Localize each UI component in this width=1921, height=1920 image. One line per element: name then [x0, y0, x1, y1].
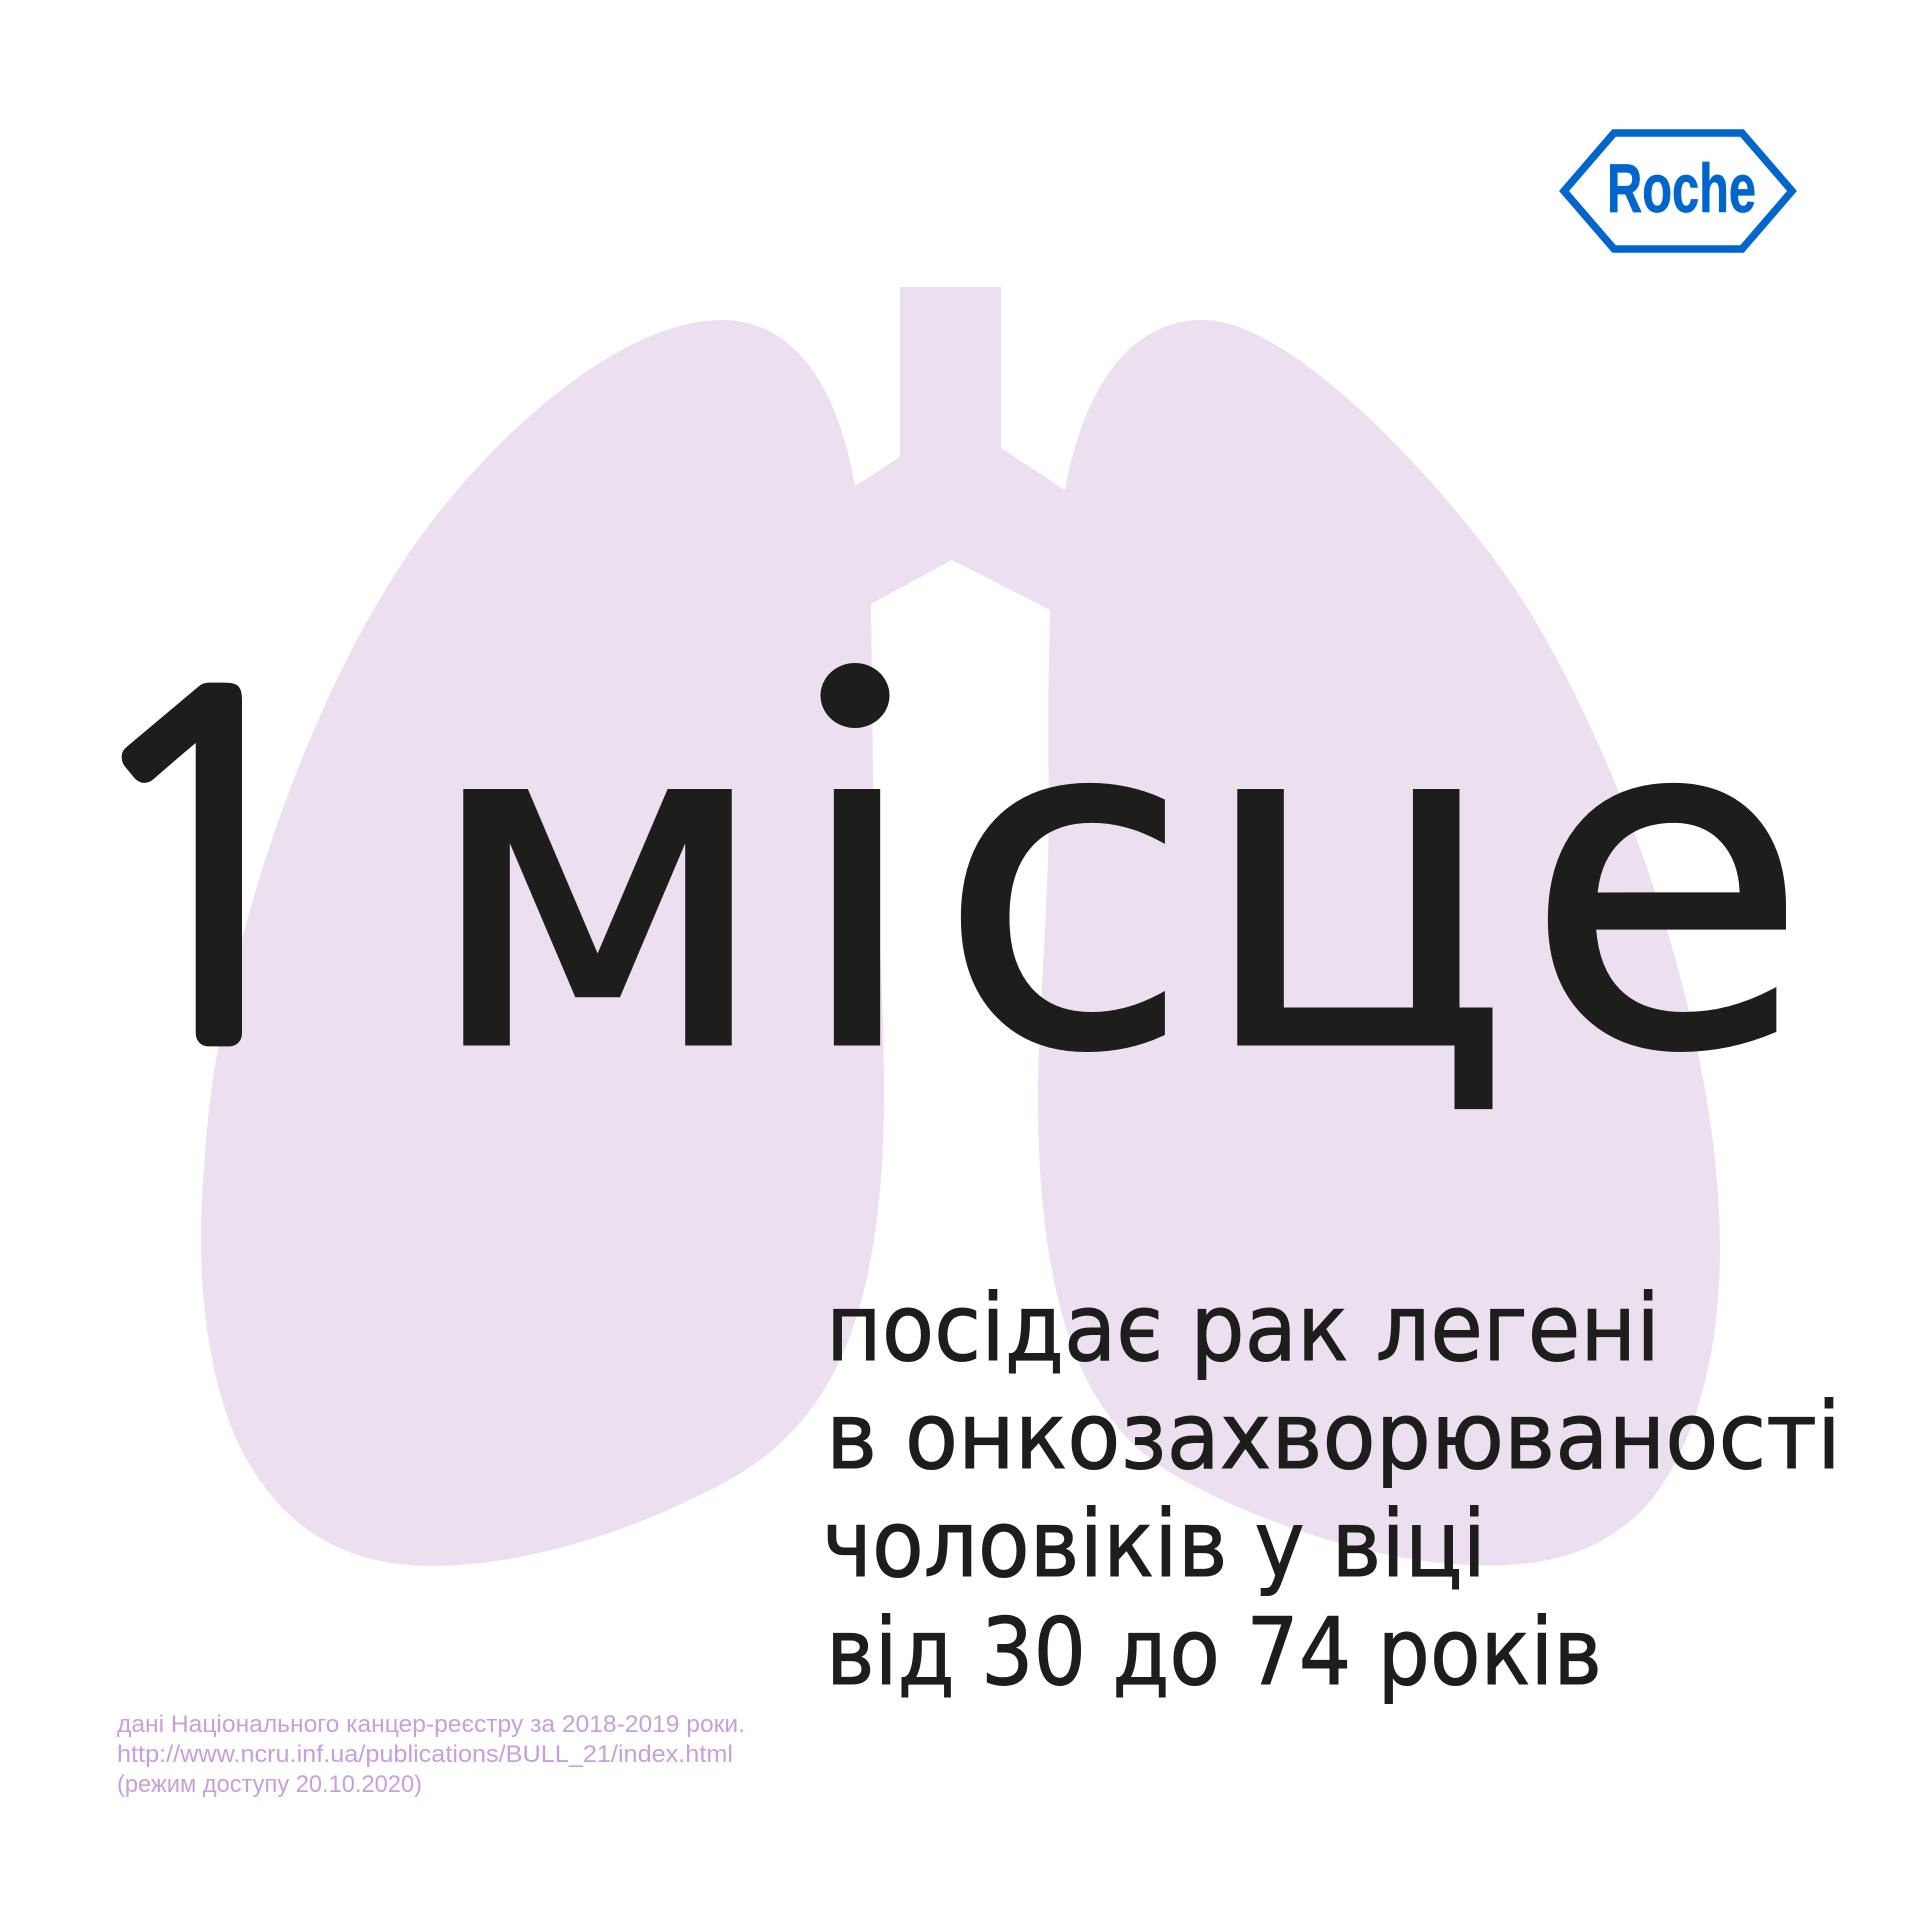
text block: description [822, 1274, 1841, 1706]
text block: description: в онкозахворюваності [826, 1382, 1841, 1490]
text block: description: від 30 до 74 років [826, 1598, 1602, 1706]
logo: Roche [1564, 133, 1792, 249]
text block: description: посідає рак легені [826, 1274, 1660, 1382]
icon: lungs [201, 287, 1720, 1566]
source note: (режим доступу 20.10.2020) [117, 1771, 422, 1798]
source note: http://www.ncru.inf.ua/publications/BULL_21/index.html [117, 1741, 733, 1768]
heading: 1 місце: місце [424, 617, 1808, 1152]
source note [117, 1711, 745, 1798]
heading: 1 місце: 1 [62, 637, 346, 1106]
heading: 1 місце [122, 663, 1786, 1110]
text block: description: чоловіків у віці [822, 1490, 1486, 1598]
source note: дані Національного канцер-реєстру за 2018-2019 роки. [117, 1711, 745, 1738]
logo: Roche: Roche [1607, 150, 1756, 227]
